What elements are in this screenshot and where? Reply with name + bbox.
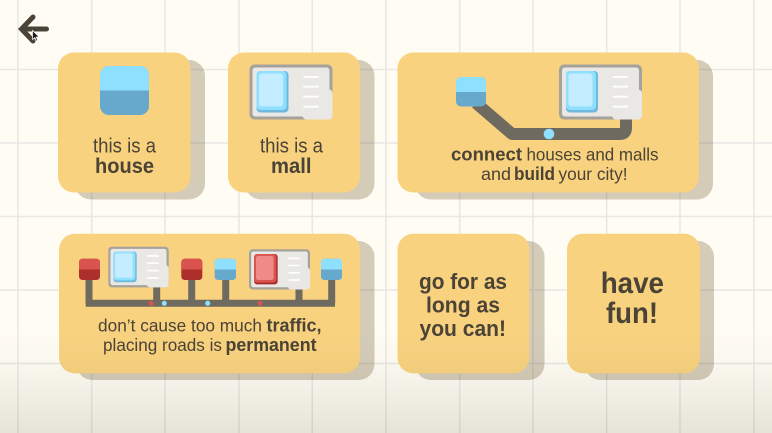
- icon: mall blue: [108, 247, 169, 287]
- text: traffic warning: permanent: [226, 335, 316, 355]
- panel: traffic: [59, 234, 374, 380]
- text: traffic warning: don’t cause too much: [98, 316, 262, 336]
- icon: red house: [79, 259, 100, 280]
- text: this is a mall: [260, 135, 324, 178]
- panel: have fun: [567, 234, 714, 380]
- text: traffic warning: traffic,: [266, 316, 322, 336]
- text: go for as long as you can: go for as: [419, 269, 507, 294]
- icon: mall: [250, 64, 332, 120]
- text: connect houses and malls: build: [514, 164, 555, 184]
- road network with cars: [86, 278, 335, 306]
- panel: house: [58, 52, 205, 200]
- icon: blue house: [215, 259, 236, 280]
- text: this is a mall: this is a: [260, 135, 324, 158]
- text: traffic warning: placing roads is: [103, 335, 222, 355]
- text: this is a house: [93, 135, 157, 178]
- panel: mall: [228, 52, 374, 200]
- icon: mall: [559, 64, 642, 120]
- text: have fun: have: [601, 267, 664, 300]
- text: have fun: fun!: [606, 297, 658, 330]
- icon: red house: [181, 259, 202, 280]
- icon: house: [456, 77, 486, 106]
- text: connect houses and malls: connect: [451, 144, 522, 164]
- text: connect houses and malls: [451, 144, 659, 184]
- text: have fun: [601, 267, 664, 330]
- text: go for as long as you can: you can!: [420, 316, 506, 341]
- text: this is a house: house: [95, 155, 154, 178]
- text: connect houses and malls: your city!: [558, 164, 628, 184]
- text: go for as long as you can: [419, 269, 507, 341]
- road with car: [476, 103, 626, 139]
- text: connect houses and malls: houses and malls: [526, 144, 659, 164]
- text: go for as long as you can: long as: [426, 293, 500, 318]
- icon: house: [100, 66, 149, 115]
- icon: back arrow: [22, 17, 46, 41]
- text: this is a house: this is a: [93, 135, 157, 158]
- panel: connect: [398, 52, 713, 200]
- text: connect houses and malls: and: [481, 164, 511, 184]
- panel: go for as long as you can: [398, 234, 544, 380]
- text: this is a mall: mall: [271, 155, 312, 178]
- text: traffic warning: [98, 316, 322, 355]
- icon: mall red: [249, 249, 310, 289]
- icon: blue house: [321, 259, 342, 280]
